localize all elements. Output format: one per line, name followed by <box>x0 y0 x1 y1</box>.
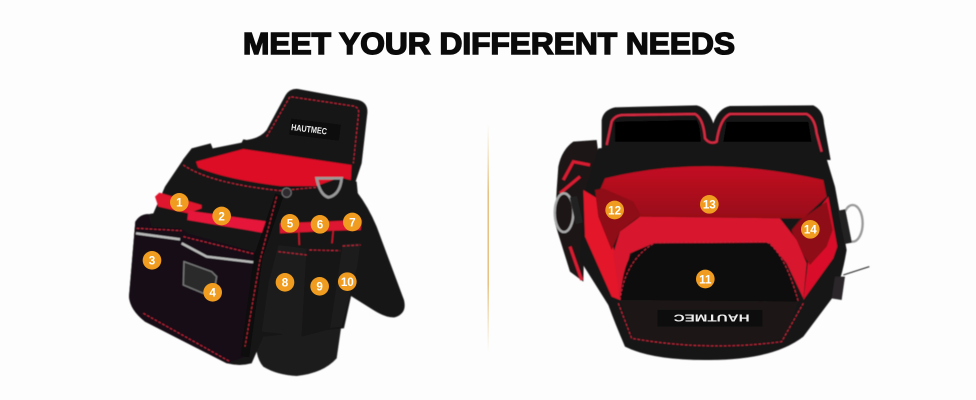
pocket 12 <box>595 188 641 250</box>
number badge 11: 11 <box>699 273 712 286</box>
red interior <box>196 149 352 193</box>
number badge 8: 8 <box>282 277 289 290</box>
black bottom panel <box>620 243 798 302</box>
D ring left <box>555 193 573 232</box>
red inner right wall <box>797 197 837 300</box>
cord end <box>843 267 869 275</box>
number badge 3: 3 <box>149 255 156 268</box>
left and centre pockets <box>129 214 258 363</box>
number badge 4 <box>203 283 222 302</box>
small pockets <box>262 245 307 337</box>
number badge 6: 6 <box>317 219 324 232</box>
number badge 1: 1 <box>176 197 183 210</box>
number badge 14 <box>801 220 820 239</box>
number badge 5 <box>281 214 299 233</box>
main body <box>129 159 363 365</box>
rear support flap <box>347 192 405 317</box>
bag artwork <box>555 105 869 360</box>
brand name: HAUTMEC <box>291 122 328 137</box>
logo patch <box>289 119 341 141</box>
rear flap with logo <box>247 89 367 183</box>
red floor <box>613 217 807 298</box>
metal clip <box>183 262 217 293</box>
number badge 14: 14 <box>804 224 817 237</box>
number badge 10: 10 <box>341 276 354 289</box>
number badge 9 <box>310 277 329 296</box>
red inner left wall <box>583 190 620 300</box>
number badge 4: 4 <box>209 287 216 300</box>
brand name mirrored: HAUTMEC <box>674 312 750 323</box>
number badge 7 <box>343 213 362 231</box>
bag outer body <box>580 144 847 360</box>
logo patch <box>657 310 762 327</box>
number badge 9: 9 <box>316 281 323 294</box>
number badge 3 <box>143 251 161 270</box>
D ring <box>317 178 342 197</box>
bottom rounded pocket <box>255 317 343 376</box>
number badge 13: 13 <box>703 199 716 212</box>
rivet <box>282 188 291 197</box>
reflective strip <box>136 233 257 263</box>
number badge 13 <box>700 195 719 214</box>
number badge 7: 7 <box>349 216 356 229</box>
number badge 8 <box>276 273 294 292</box>
rear pocket tops <box>602 105 831 160</box>
number badge 1 <box>170 193 189 212</box>
strap cluster left <box>555 140 602 282</box>
number badge 6 <box>311 215 329 234</box>
number badge 12 <box>605 201 624 219</box>
red cords <box>299 227 333 245</box>
number badge 2: 2 <box>218 210 225 223</box>
number badge 12: 12 <box>608 204 622 217</box>
divider <box>488 124 489 352</box>
bag artwork <box>129 89 405 376</box>
product photo: tool pouch top view <box>555 105 869 360</box>
rim behind opening <box>183 139 353 177</box>
title: MEET YOUR DIFFERENT NEEDS <box>243 26 735 61</box>
product photo: tool pouch front view <box>129 89 405 376</box>
number badge 11 <box>696 270 715 288</box>
pocket 14 <box>792 202 833 265</box>
number badge 5: 5 <box>287 218 294 231</box>
red webbing <box>155 193 202 213</box>
number badge 10 <box>338 272 357 291</box>
D ring right <box>843 205 863 242</box>
red back interior <box>600 166 827 230</box>
centre seam <box>245 195 279 357</box>
number badge 2 <box>212 207 231 225</box>
